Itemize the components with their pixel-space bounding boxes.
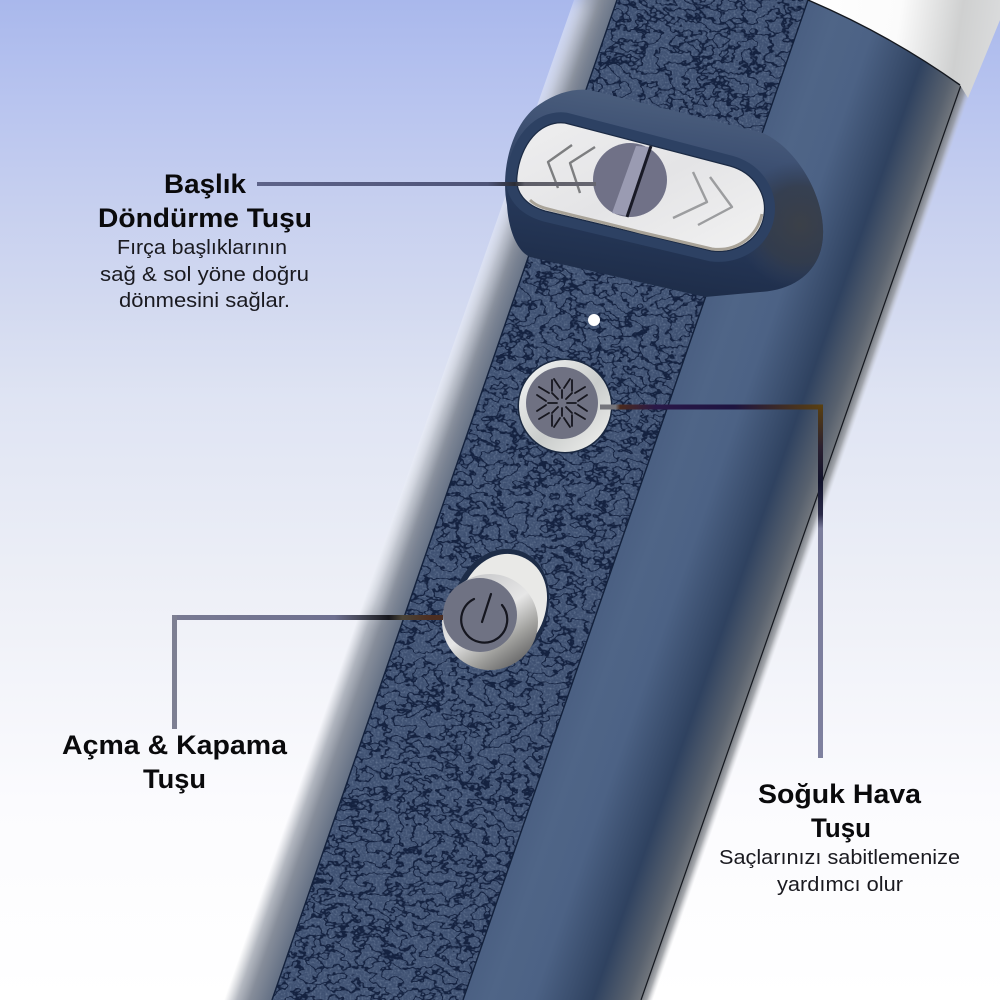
label: power button: Tuşu bbox=[143, 764, 206, 794]
label: power button bbox=[62, 730, 288, 794]
left chevrons bbox=[548, 145, 595, 193]
collar edge line bbox=[808, 0, 960, 85]
icon: tree snowflake bbox=[537, 379, 587, 427]
white collar of the device bbox=[808, 0, 1000, 98]
rocker button bbox=[517, 123, 764, 251]
leather right seam bbox=[463, 0, 808, 1000]
housing shell bbox=[505, 90, 823, 297]
button ring bbox=[517, 123, 764, 251]
icon: power bbox=[461, 594, 507, 643]
power disc bbox=[443, 578, 517, 652]
description: sağ & sol yöne doğru bbox=[100, 264, 309, 286]
label: power button: Açma & Kapama bbox=[62, 730, 288, 760]
leader line: power bbox=[172, 615, 443, 729]
label: cold air button: Soğuk Hava bbox=[758, 779, 922, 809]
status LED bbox=[588, 314, 600, 326]
right chevrons bbox=[673, 172, 732, 225]
description: Fırça başlıklarının bbox=[117, 237, 287, 259]
description: Saçlarınızı sabitlemenize bbox=[719, 847, 960, 869]
white pocket bbox=[466, 554, 547, 644]
housing shaded hump bbox=[735, 133, 823, 292]
light falloff at the upper left of the handle bbox=[360, 0, 590, 620]
description bbox=[719, 847, 960, 896]
power button bbox=[442, 549, 549, 670]
rocker centre marker bbox=[593, 143, 667, 217]
heading: Başlık bbox=[164, 169, 247, 199]
head rotation switch housing bbox=[505, 90, 823, 297]
handle edge line bbox=[641, 85, 961, 1000]
description: yardımcı olur bbox=[777, 874, 903, 896]
leather left seam bbox=[272, 0, 617, 1000]
device: hair dryer brush handle bbox=[224, 0, 1000, 1000]
heading second line: Döndürme Tuşu bbox=[98, 203, 312, 233]
leader line: cold air bbox=[600, 404, 823, 758]
button recess bbox=[458, 549, 549, 650]
label: cold air button bbox=[719, 779, 960, 896]
leather grip strip bbox=[260, 0, 820, 1000]
label: cold air button: Tuşu bbox=[811, 813, 871, 843]
silver bezel bbox=[442, 574, 538, 670]
description bbox=[100, 237, 309, 312]
cold air button bbox=[518, 358, 612, 454]
handle body bbox=[224, 0, 1000, 1000]
label: head rotation button bbox=[98, 169, 312, 312]
button lower bevel bbox=[530, 200, 762, 249]
leader line: head rotation bbox=[257, 182, 596, 186]
description: dönmesini sağlar. bbox=[119, 290, 290, 312]
